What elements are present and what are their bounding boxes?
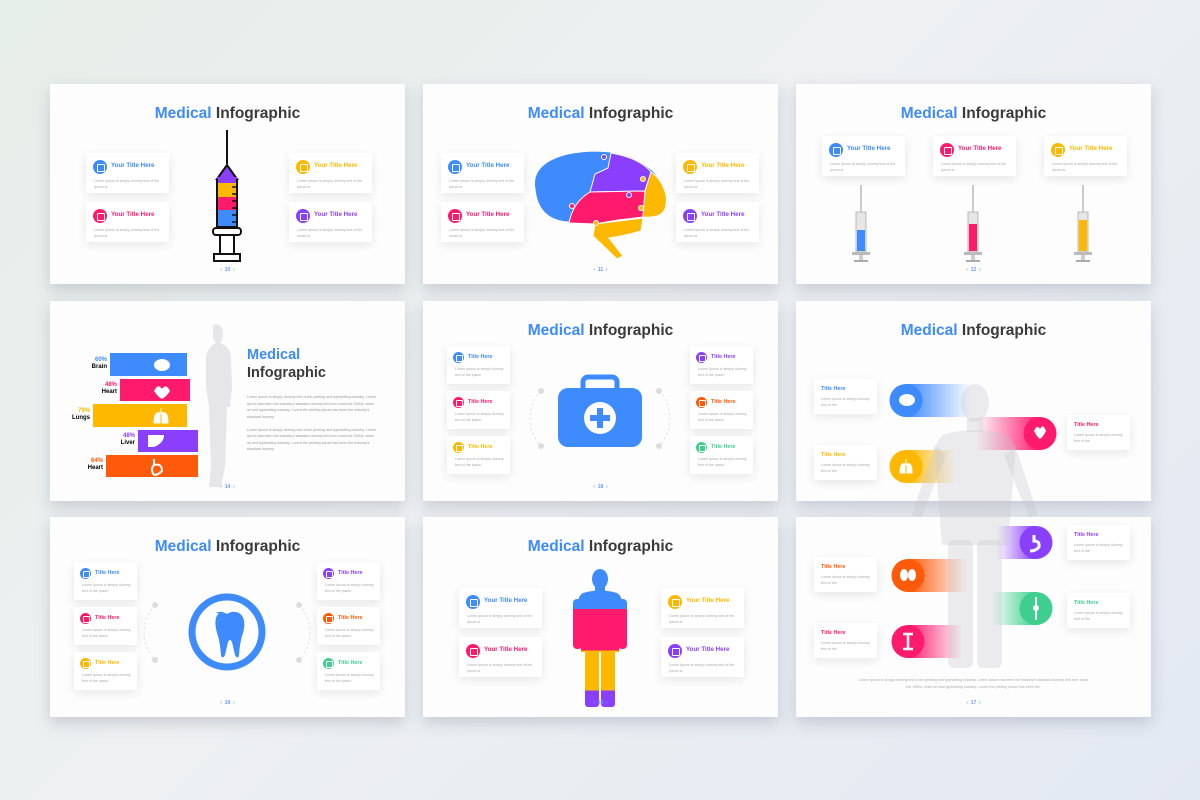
icon: syringes [852,185,1092,262]
card: yellow [814,445,877,480]
card: orange: Title Here [711,399,735,405]
card: green: Title Here [1074,600,1098,606]
card: pink [447,391,510,429]
card: orange [814,557,877,592]
card: pink: Lorem Ipsum is simply dummy text of the ipsum is [449,228,514,238]
card: pink [441,202,524,242]
card: green [1067,593,1130,628]
card: yellow [661,588,744,628]
card: purple: Lorem Ipsum is simply dummy text of the ipsum is [684,228,749,238]
card: purple [676,202,759,242]
labels: 64% [91,458,103,464]
card: yellow: Title Here [95,660,119,666]
organ bands [890,384,1056,483]
card: purple: Title Here [338,570,362,576]
footer text: Lorem Ipsum is simply dummy text of the printing and typesetting industry. Lorem Ipsum has been the industry's standard dummy text ever since the 1500s, when an and typesetting industry. Lorem the printing Ipsum has been the. [859,678,1088,688]
card: pink: Title Here [821,630,845,636]
card: blue: Your Title Here [466,162,509,169]
icon: brain puzzle [534,152,666,258]
title [247,347,326,381]
card: blue [822,136,905,176]
card: purple: Title Here [711,354,735,360]
card: blue [441,153,524,193]
icon: colored body [573,569,627,707]
card: yellow: Title Here [821,452,845,458]
card: blue: Your Title Here [847,145,890,152]
card: pink: Your Title Here [466,211,509,218]
card: yellow: Your Title Here [701,162,744,169]
card: pink: Title Here [95,615,119,621]
labels: Brain [92,364,107,370]
slide 7: tooth [50,517,405,717]
page number: ‹ 17 › [966,700,981,706]
card: pink: Your Title Here [484,646,527,653]
card: pink: Lorem Ipsum is simply dummy text of the [821,641,870,651]
card: yellow [74,652,137,690]
icon: tooth [144,594,310,670]
title: Medical Infographic [155,538,300,555]
card: orange: Lorem Ipsum is simply dummy text of the ipsum [325,628,374,638]
text block: Lorem Ipsum is simply dummy text of the printing and typesetting industry. Lorem Ipsum has been the industry's standard dummy text ever since the 1500s, when an and typesetting industry. Lorem the printing Ipsum has been the industry's standard dummy. [247,395,376,418]
silhouette: woman [206,324,232,487]
card: yellow: Lorem Ipsum is simply dummy text of the ipsum [455,457,504,467]
card: purple [661,637,744,677]
card: purple: Lorem Ipsum is simply dummy text of the ipsum [698,367,747,377]
labels: 48% [105,382,117,388]
card: blue [74,562,137,600]
card: orange: Lorem Ipsum is simply dummy text of the [821,575,870,585]
bar chart [93,324,232,487]
card: pink: Lorem Ipsum is simply dummy text of the ipsum [455,412,504,422]
page number: ‹ 11 › [593,267,608,273]
labels: 48% [123,433,135,439]
card: yellow: Lorem Ipsum is simply dummy text of the ipsum is [684,179,749,189]
card: blue: Lorem Ipsum is simply dummy text of the ipsum [82,583,131,593]
card: yellow [447,436,510,474]
icon: first aid kit [530,374,670,449]
card: pink [459,637,542,677]
card: green: Lorem Ipsum is simply dummy text of the ipsum [325,673,374,683]
card: blue: Lorem Ipsum is simply dummy text of the [821,397,870,407]
card: blue [459,588,542,628]
card: orange: Title Here [338,615,362,621]
card: pink: Lorem Ipsum is simply dummy text of the ipsum is [941,162,1006,172]
card: pink: Your Title Here [111,211,154,218]
slide 9: body organs bottom [796,517,1151,717]
card: purple: Your Title Here [686,646,729,653]
card: purple: Your Title Here [314,211,357,218]
card: blue: Title Here [821,386,845,392]
card: purple: Your Title Here [701,211,744,218]
page number: ‹ 19 › [220,700,235,706]
labels: 79% [78,408,90,414]
title: Medical Infographic [528,322,673,339]
card: pink: Your Title Here [958,145,1001,152]
title: Medical Infographic [155,105,300,122]
icon: syringe [212,130,242,262]
card: pink: Title Here [1074,422,1098,428]
card: blue: Your Title Here [111,162,154,169]
slide 5: first aid kit [423,301,778,501]
card: blue: Lorem Ipsum is simply dummy text of the ipsum is [94,179,159,189]
card: blue: Lorem Ipsum is simply dummy text of the ipsum is [467,614,532,624]
slide 2: brain [423,84,778,284]
title: Infographic [247,365,326,381]
card: purple: Lorem Ipsum is simply dummy text of the ipsum [325,583,374,593]
title: Medical Infographic [528,105,673,122]
card: blue [447,346,510,384]
card: yellow: Lorem Ipsum is simply dummy text of the ipsum [82,673,131,683]
text block: Lorem Ipsum is simply dummy text of the printing and typesetting industry. Lorem Ipsum has been the industry's standard dummy text ever since the 1500s, when an and typesetting industry. Lorem the printing Ipsum has been the industry's standard dummy. [247,428,376,451]
card: orange [317,607,380,645]
labels: Heart [102,389,117,395]
card: yellow: Lorem Ipsum is simply dummy text of the ipsum is [1052,162,1117,172]
slide 8: human body [423,517,778,717]
card: purple: Lorem Ipsum is simply dummy text of the [1074,543,1123,553]
card: pink: Title Here [468,399,492,405]
card: yellow: Title Here [468,444,492,450]
card: blue: Title Here [95,570,119,576]
card: pink [86,202,169,242]
card: blue: Lorem Ipsum is simply dummy text of the ipsum is [449,179,514,189]
card: blue: Lorem Ipsum is simply dummy text of the ipsum is [830,162,895,172]
card: yellow: Lorem Ipsum is simply dummy text of the ipsum is [669,614,734,624]
card: pink: Lorem Ipsum is simply dummy text of the ipsum [82,628,131,638]
slide 6: body organs top [796,301,1151,501]
card: yellow [676,153,759,193]
card: yellow: Lorem Ipsum is simply dummy text of the ipsum is [297,179,362,189]
page number: ‹ 16 › [593,700,608,706]
card: green: Title Here [711,444,735,450]
card: yellow: Lorem Ipsum is simply dummy text of the [821,463,870,473]
card: yellow [289,153,372,193]
card: green: Lorem Ipsum is simply dummy text of the [1074,611,1123,621]
card: yellow: Your Title Here [1069,145,1112,152]
card: orange: Title Here [821,564,845,570]
title: Medical [247,347,300,363]
card: yellow: Your Title Here [686,597,729,604]
card: orange: Lorem Ipsum is simply dummy text of the ipsum [698,412,747,422]
card: blue [814,379,877,414]
card: pink [814,623,877,658]
card: purple: Title Here [1074,532,1098,538]
card: pink [933,136,1016,176]
card: blue: Title Here [468,354,492,360]
page number: ‹ 12 › [966,267,981,273]
card: purple [317,562,380,600]
labels: Liver [121,440,135,446]
card: pink: Lorem Ipsum is simply dummy text of the [1074,433,1123,443]
title: Medical Infographic [528,538,673,555]
card: pink: Lorem Ipsum is simply dummy text of the ipsum is [94,228,159,238]
slide 1: syringe [50,84,405,284]
page number: ‹ 18 › [593,484,608,490]
card: purple: Lorem Ipsum is simply dummy text of the ipsum is [669,663,734,673]
card: purple [289,202,372,242]
slide 3: three syringes [796,84,1151,284]
card: blue: Lorem Ipsum is simply dummy text of the ipsum [455,367,504,377]
title: Medical Infographic [901,105,1046,122]
card: blue [86,153,169,193]
page number: ‹ 10 › [220,267,235,273]
card: pink [1067,415,1130,450]
title: Medical Infographic [901,322,1046,339]
card: green: Title Here [338,660,362,666]
slide 4: organ bars [50,301,405,501]
card: pink [74,607,137,645]
card: yellow: Your Title Here [314,162,357,169]
labels: Heart [88,465,103,471]
card: orange [690,391,753,429]
card: purple [1067,525,1130,560]
labels: 60% [95,357,107,363]
card: green [317,652,380,690]
text block [247,395,376,451]
card: green [690,436,753,474]
card: pink: Lorem Ipsum is simply dummy text of the ipsum is [467,663,532,673]
card: green: Lorem Ipsum is simply dummy text of the ipsum [698,457,747,467]
card: purple: Lorem Ipsum is simply dummy text of the ipsum is [297,228,362,238]
organ bands [892,526,1052,658]
card: yellow [1044,136,1127,176]
page number: ‹ 14 › [220,484,235,490]
labels: Lungs [72,415,90,421]
labels [72,356,135,471]
card: blue: Your Title Here [484,597,527,604]
card: purple [690,346,753,384]
